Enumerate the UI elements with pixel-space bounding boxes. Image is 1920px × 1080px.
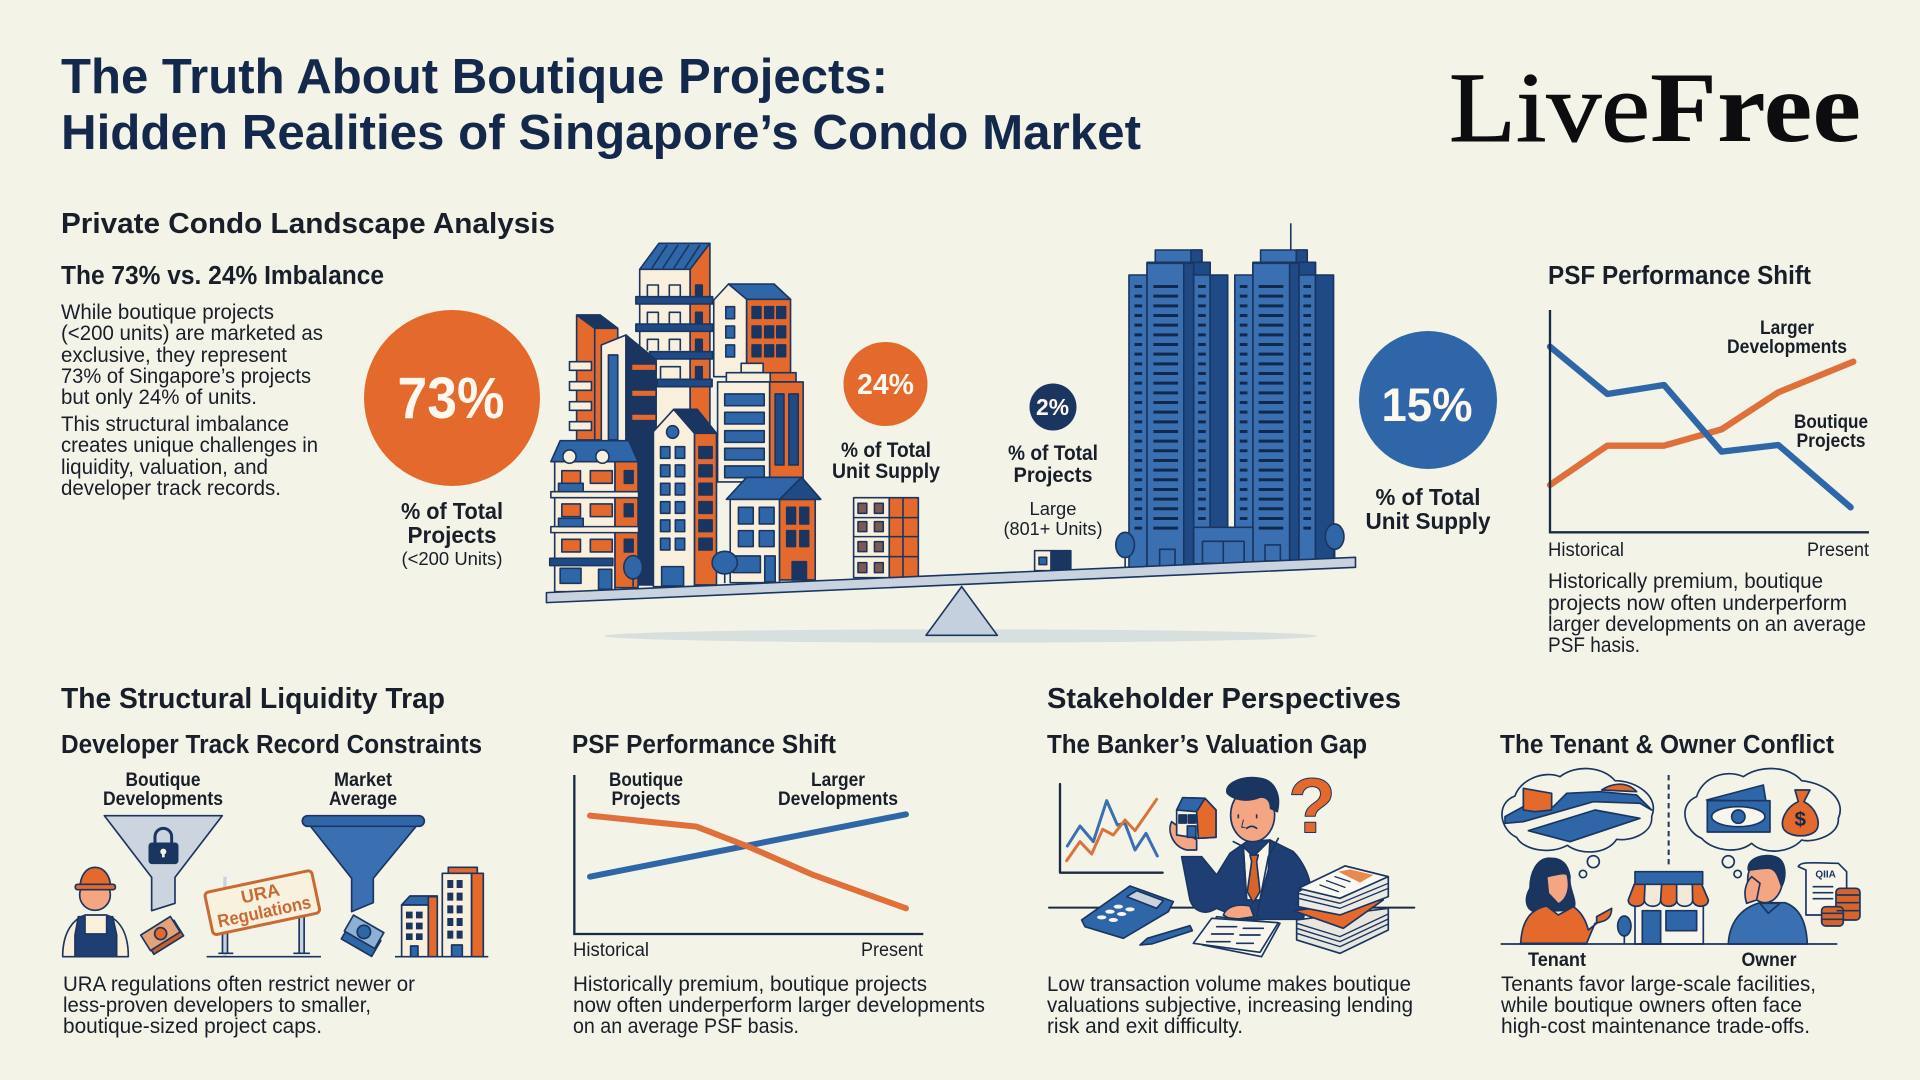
- paper stack: [1293, 866, 1388, 953]
- sign: URA Regulations: URA: [239, 880, 282, 907]
- text block: [1548, 570, 1866, 657]
- text block: imbalance explanation: This structural imbalance: [61, 413, 289, 436]
- stat: 2% of total projects, large: % of Total: [1008, 442, 1098, 465]
- funnel diagram: [63, 816, 488, 957]
- icon: orange banknotes: [141, 916, 184, 955]
- text block: while boutique owners often face: [1500, 994, 1802, 1017]
- seesaw beam: [546, 557, 1355, 603]
- thought dots: [1579, 856, 1741, 878]
- back tower: [636, 243, 713, 443]
- stat: 73% of total projects: 73%: [398, 366, 504, 431]
- text block: [1500, 973, 1816, 1038]
- icon: storefront: [1618, 872, 1708, 944]
- text block: now often underperform larger developments: [573, 994, 985, 1017]
- heading: Private Condo Landscape Analysis: Private Condo Landscape Analysis: [61, 208, 555, 240]
- icon: bill and coins: QIIA: [1815, 869, 1836, 880]
- icon: pencil: [1140, 926, 1192, 945]
- text block: boutique-sized project caps.: [63, 1015, 322, 1038]
- stat: 15% unit supply: [1359, 331, 1497, 534]
- icon: calculator: [1082, 886, 1173, 938]
- desk line: [1049, 905, 1414, 911]
- chart labels: Developments: [778, 789, 898, 810]
- chart labels: Present: [1807, 540, 1870, 561]
- stat: 2% of total projects, large: Projects: [1014, 464, 1092, 487]
- chart labels: Historical: [573, 940, 649, 961]
- text block: imbalance explanation: developer track records.: [61, 477, 281, 500]
- panel: PSF performance shift (bottom): [572, 731, 985, 1038]
- stat: 24% unit supply: 24%: [857, 369, 914, 401]
- text block: imbalance explanation: liquidity, valuation, and: [61, 456, 268, 479]
- stat: 2% of total projects, large: 2%: [1036, 394, 1069, 420]
- title: [61, 50, 1141, 160]
- subheading: The Banker’s Valuation Gap: [1047, 731, 1367, 759]
- text block: larger developments on an average: [1548, 613, 1866, 636]
- text block: imbalance explanation: exclusive, they represent: [61, 344, 287, 367]
- funnel labels: Market: [334, 770, 393, 791]
- chart labels: Boutique: [1794, 412, 1868, 433]
- chart labels: [573, 770, 924, 961]
- heading: Stakeholder Perspectives: Stakeholder Perspectives: [1047, 683, 1401, 715]
- stat: 2% of total projects, large: Large: [1030, 499, 1076, 519]
- circle: 73%: [364, 310, 540, 486]
- line chart: [574, 775, 923, 934]
- panel: developer track record constraints: [61, 731, 488, 1038]
- subheading: Developer Track Record Constraints: [61, 731, 482, 759]
- funnel labels: Boutique: [126, 770, 200, 791]
- icon: house in hand: [1177, 798, 1216, 838]
- text block: imbalance explanation: creates unique challenges in: [61, 434, 318, 457]
- chart labels: Projects: [612, 789, 680, 810]
- icon: owner: [1728, 856, 1807, 944]
- line chart: [1550, 310, 1869, 532]
- text block: [573, 973, 985, 1038]
- illustration: banker at desk: [1049, 762, 1414, 957]
- left tower: [1129, 250, 1228, 568]
- icon: construction worker: [63, 867, 128, 957]
- fulcrum triangle: [926, 587, 997, 635]
- heading: The Structural Liquidity Trap: The Structural Liquidity Trap: [61, 683, 445, 715]
- stat: 24% unit supply: % of Total: [841, 439, 931, 462]
- text block: imbalance explanation: While boutique projects: [61, 301, 274, 324]
- title: The Truth About Boutique Projects:: [61, 50, 888, 104]
- icon: tenant: [1519, 858, 1612, 944]
- subheading: The Tenant & Owner Conflict: [1500, 731, 1834, 759]
- small trees: [624, 551, 737, 587]
- ground shadow: [604, 629, 1317, 643]
- text block: on an average PSF basis.: [573, 1015, 799, 1038]
- person labels: Tenant: [1528, 950, 1587, 971]
- funnel labels: Developments: [103, 789, 223, 810]
- front right house: [726, 477, 821, 583]
- left orange slab: [569, 315, 618, 440]
- text block: Tenants favor large-scale facilities,: [1501, 973, 1816, 996]
- project count block (2%): [1035, 551, 1071, 571]
- title: Hidden Realities of Singapore’s Condo Market: [61, 106, 1141, 160]
- tower trees: [1116, 524, 1344, 567]
- text block: imbalance explanation: but only 24% of units.: [61, 386, 257, 409]
- illustration: tenant, store and owner: [1501, 769, 1860, 944]
- stat: 15% unit supply: Unit Supply: [1366, 508, 1491, 534]
- stat: 15% unit supply: 15%: [1382, 378, 1472, 431]
- funnel labels: [103, 770, 397, 810]
- text block: URA regulations often restrict newer or: [63, 973, 415, 996]
- thought bubble: pool: [1502, 769, 1653, 852]
- podium: [1194, 527, 1253, 564]
- central gabled townhouse: [653, 409, 716, 587]
- text block: PSF hasis.: [1548, 634, 1640, 657]
- boutique building cluster: [550, 243, 821, 592]
- person labels: Owner: [1742, 950, 1797, 971]
- text block: Low transaction volume makes boutique: [1047, 973, 1411, 996]
- right tower: [1235, 250, 1334, 562]
- stat: 24% unit supply: [832, 342, 940, 483]
- panel: PSF performance shift (top right): [1548, 262, 1870, 657]
- icon: market buildings: [395, 867, 488, 957]
- text block: risk and exit difficulty.: [1047, 1015, 1243, 1038]
- stat: 24% unit supply: Unit Supply: [832, 460, 940, 483]
- chart labels: Projects: [1796, 431, 1866, 452]
- mini chart: [1060, 784, 1163, 873]
- text block: valuations subjective, increasing lending: [1047, 994, 1413, 1017]
- panel: the banker's valuation gap: [1047, 731, 1414, 1038]
- text block: less-proven developers to smaller,: [63, 994, 371, 1017]
- text block: [63, 973, 415, 1038]
- text block: high-cost maintenance trade-offs.: [1501, 1015, 1810, 1038]
- icon: blue banknotes: [340, 915, 385, 956]
- thought bubble: money: [1685, 769, 1840, 851]
- person labels: [1528, 950, 1797, 971]
- panel: 73% vs 24% imbalance text: [61, 262, 384, 500]
- stat: 73% of total projects: [364, 310, 540, 569]
- chart labels: [1548, 318, 1870, 561]
- divider dashed line: [1666, 775, 1672, 865]
- text block: imbalance explanation: [61, 301, 323, 500]
- icon: bill and coins: [1798, 863, 1860, 926]
- antenna: [1290, 223, 1292, 250]
- stat: 15% unit supply: % of Total: [1376, 484, 1480, 510]
- subheading: PSF Performance Shift: [572, 731, 836, 759]
- stat: 2% of total projects, large: [1004, 384, 1102, 539]
- text block: imbalance explanation: 73% of Singapore’s projects: [61, 365, 311, 388]
- funnel labels: Average: [329, 789, 397, 810]
- banker figure: [1170, 778, 1310, 920]
- logo: LiveFree: LiveFree: [1449, 52, 1861, 163]
- chart labels: Historical: [1548, 540, 1624, 561]
- funnel: market average: [302, 816, 424, 912]
- stat: 2% of total projects, large: (801+ Units): [1004, 519, 1102, 539]
- mid right apartment: [718, 363, 803, 482]
- stat: 73% of total projects: (<200 Units): [402, 549, 502, 569]
- slim cream and navy tower: [601, 335, 656, 585]
- document on desk: [1193, 917, 1280, 957]
- chart labels: Larger: [1760, 318, 1815, 339]
- unit supply block (24%): [854, 498, 918, 578]
- subheading: imbalance: The 73% vs. 24% Imbalance: [61, 262, 384, 290]
- chart labels: Developments: [1727, 337, 1847, 358]
- twin towers: [1116, 223, 1344, 568]
- front left mansard house: [550, 441, 639, 592]
- thought bubble: money: $: [1795, 808, 1807, 831]
- text block: projects now often underperform: [1548, 592, 1847, 615]
- stat: 73% of total projects: % of Total: [401, 498, 503, 524]
- icon: question mark: ?: [1288, 762, 1336, 850]
- back right gabled building: [714, 284, 791, 377]
- text block: Historically premium, boutique projects: [573, 973, 927, 996]
- sign: URA Regulations: Regulations: [216, 892, 313, 931]
- text block: Historically premium, boutique: [1548, 570, 1823, 593]
- text block: [1047, 973, 1413, 1038]
- subheading: PSF Performance Shift: [1548, 262, 1811, 290]
- text block: imbalance explanation: (<200 units) are marketed as: [61, 322, 323, 345]
- funnel: boutique developments: [104, 816, 222, 911]
- illustration: balance scale with buildings: [546, 223, 1355, 643]
- chart labels: Present: [861, 940, 924, 961]
- sign: URA Regulations: [204, 870, 321, 957]
- chart labels: Larger: [811, 770, 866, 791]
- stat: 73% of total projects: Projects: [408, 522, 496, 548]
- ground line: [1501, 941, 1837, 946]
- panel: the tenant and owner conflict: [1500, 731, 1860, 1038]
- chart labels: Boutique: [609, 770, 683, 791]
